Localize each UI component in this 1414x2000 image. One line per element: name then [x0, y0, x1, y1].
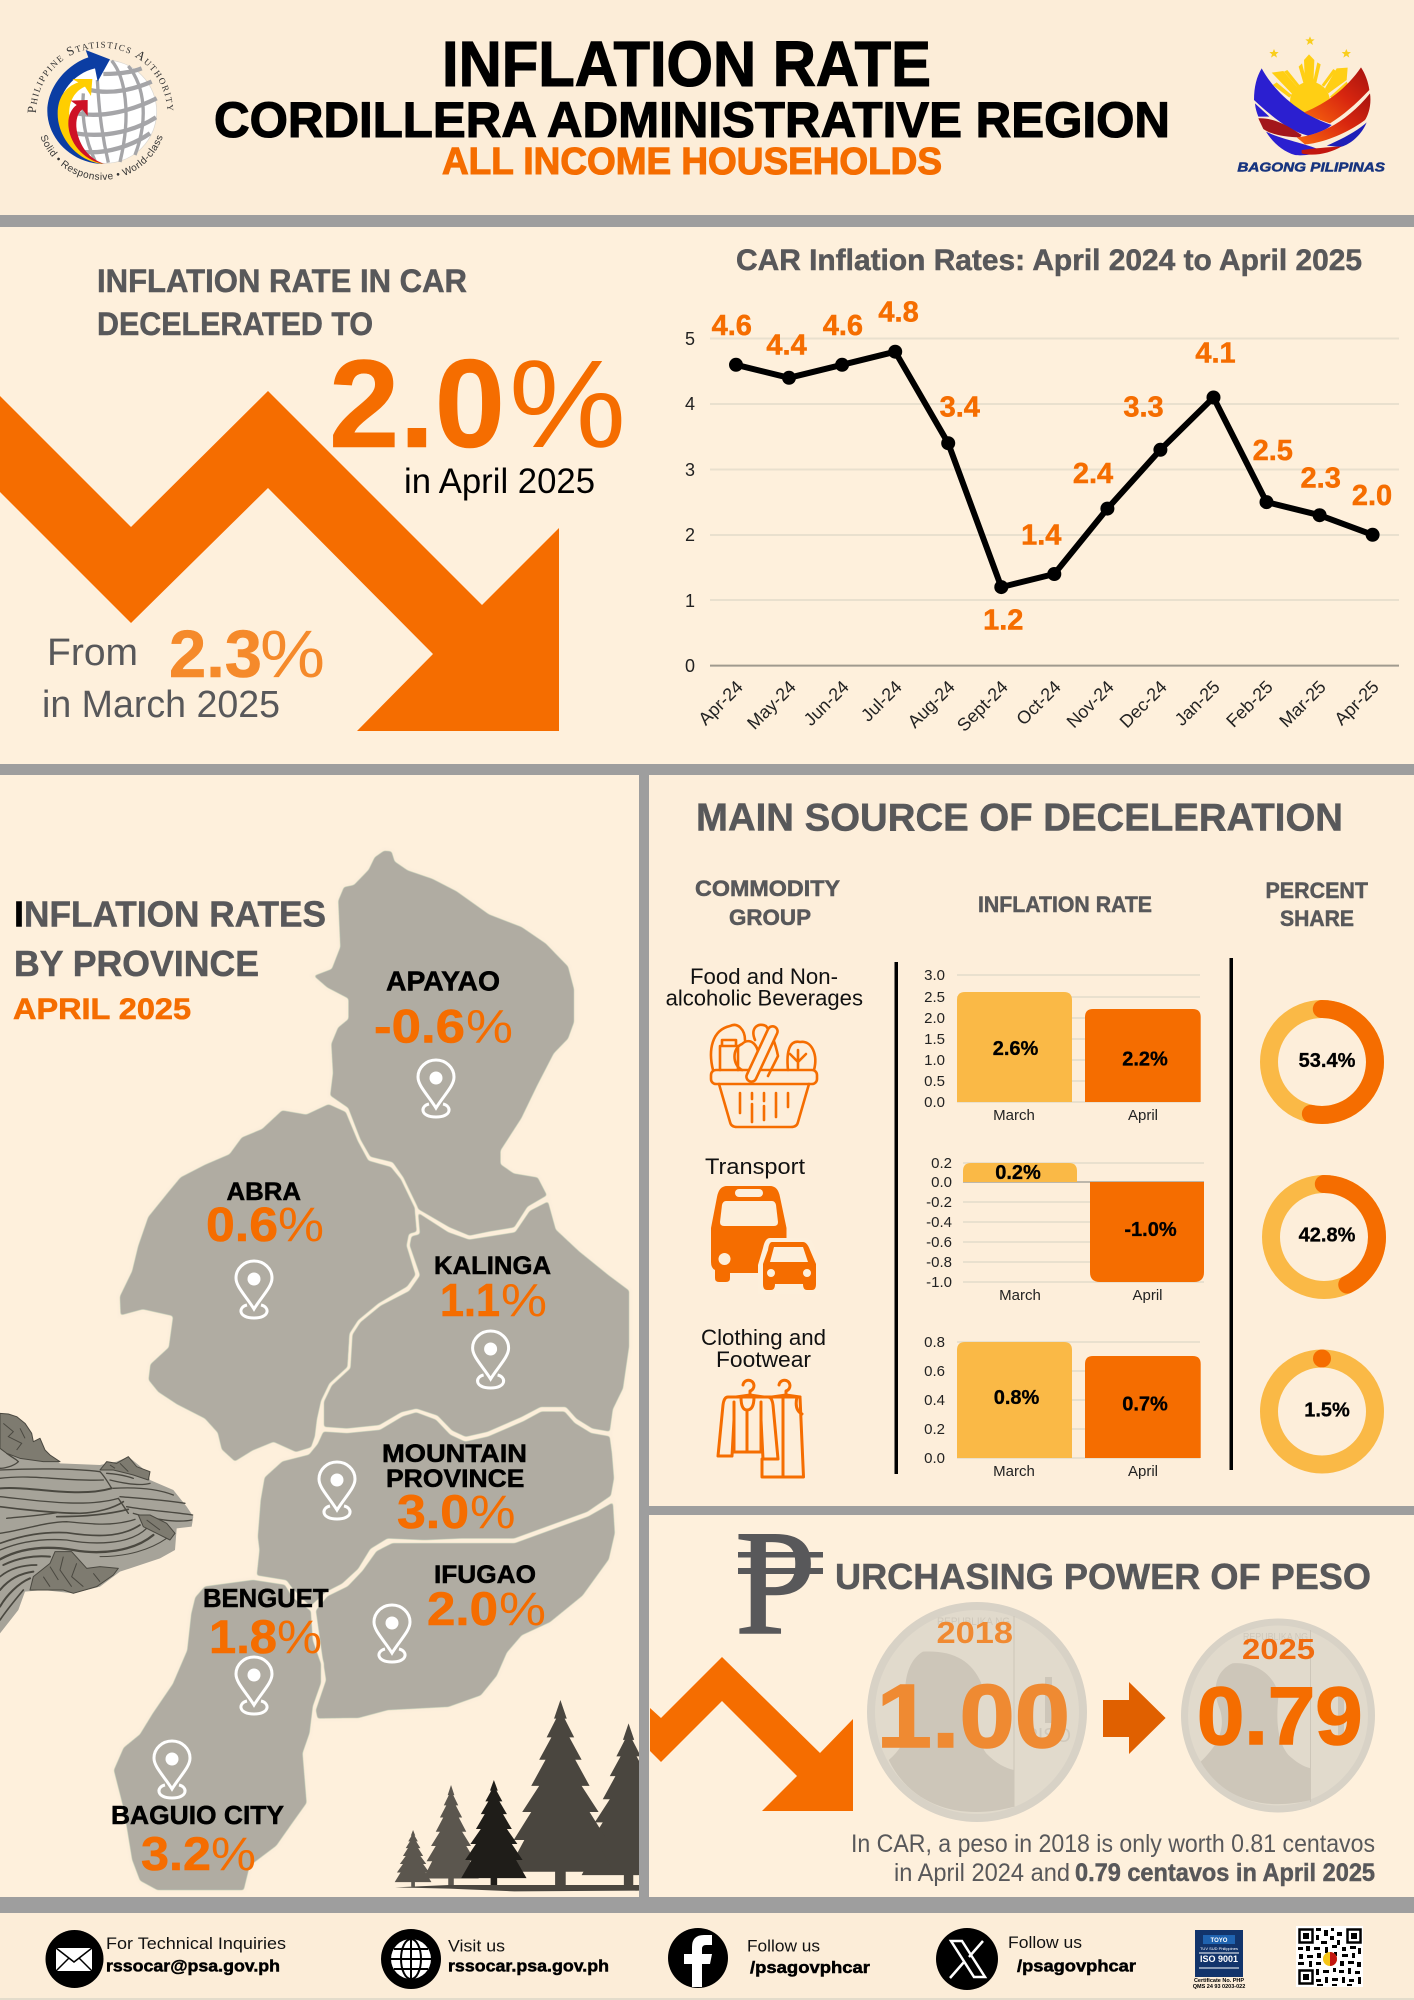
line chart: Apr-25 — [1330, 677, 1383, 729]
panel: headline inflation rate — [0, 263, 626, 731]
sub-subtitle: ALL INCOME HOUSEHOLDS — [442, 141, 942, 183]
bar chart: transport: -0.4 — [926, 1214, 952, 1231]
bar chart: transport: 0.0 — [931, 1174, 952, 1191]
line chart: 2 — [685, 525, 695, 545]
heading with peso sign: P — [735, 1500, 816, 1666]
contact: website — [381, 1929, 609, 1989]
panel: inflation rates by province — [0, 849, 676, 1892]
column header: percent share: SHARE — [1280, 906, 1354, 931]
province: Ifugao: IFUGAO — [434, 1561, 536, 1589]
bar chart: transport — [926, 1155, 1204, 1304]
province: Kalinga — [434, 1252, 551, 1388]
icon: pin — [374, 1605, 410, 1662]
logo: Philippine Statistics Authority: Solid • Responsive • World-class — [41, 135, 162, 180]
province: Apayao — [374, 966, 513, 1117]
bar chart: clothing: 0.6 — [924, 1363, 945, 1380]
province: Benguet: 1.8 — [209, 1610, 277, 1663]
line chart: 4.8 — [878, 296, 919, 328]
contact: facebook: Follow us — [747, 1937, 820, 1956]
bar chart: transport: April — [1132, 1287, 1163, 1304]
bar chart: food: 1.5 — [924, 1031, 945, 1048]
arrow between coins — [1103, 1682, 1166, 1754]
line chart: 0 — [685, 656, 695, 676]
bar chart: food: 3.0 — [924, 967, 945, 984]
value: 2.0% — [329, 335, 626, 474]
bar chart: transport: 0.2% — [995, 1162, 1041, 1184]
province: Ifugao: % — [499, 1582, 546, 1635]
coin: 2018 — [867, 1602, 1087, 1822]
province: Abra — [206, 1178, 324, 1318]
line chart: Sept-24 — [953, 677, 1012, 735]
badge: ISO 9001: Certificate No. PHP — [1194, 1978, 1244, 1984]
bar chart: transport: March — [999, 1287, 1041, 1304]
subtitle: CORDILLERA ADMINISTRATIVE REGION — [214, 92, 1170, 148]
coin: 2025: REPUBLIKA NG — [1243, 1632, 1308, 1643]
icon: pin — [473, 1331, 509, 1388]
bar chart: food: 1.0 — [924, 1052, 945, 1069]
caption: in April 2024 and — [894, 1859, 1070, 1887]
icon: pin — [418, 1060, 454, 1117]
label: food — [666, 964, 863, 1011]
province: Mountain Province: MOUNTAIN — [382, 1440, 527, 1468]
bar chart: transport: -1.0% — [1124, 1219, 1177, 1241]
coin: 2025 — [1181, 1618, 1375, 1812]
caption: in April 2025 — [404, 462, 595, 501]
province: Mountain Province — [319, 1440, 527, 1538]
label: from: From — [47, 632, 138, 674]
coin: 2018: 2018 — [936, 1615, 1013, 1650]
bar chart: food: 2.6% — [993, 1038, 1039, 1060]
icon: food basket — [711, 1025, 817, 1127]
province: Kalinga: KALINGA — [434, 1252, 551, 1280]
province: Benguet: BENGUET — [203, 1583, 329, 1613]
province: Apayao: APAYAO — [386, 966, 500, 997]
coin: 2018: PISO — [1025, 1725, 1071, 1747]
bar chart: food — [924, 967, 1201, 1124]
column header: commodity group — [695, 876, 840, 930]
column header: inflation rate: INFLATION RATE — [978, 892, 1152, 917]
icon: pin — [154, 1741, 190, 1798]
badge: ISO 9001: TOYO — [1211, 1938, 1228, 1944]
line chart: Oct-24 — [1012, 677, 1065, 729]
line chart: Jul-24 — [857, 677, 906, 725]
province: Baguio City — [111, 1741, 284, 1880]
line chart: Dec-24 — [1116, 677, 1171, 732]
line chart: 4.4 — [766, 330, 807, 362]
panel: line chart — [685, 244, 1399, 735]
icon: big down arrow — [0, 391, 559, 731]
icon: down arrow — [650, 1657, 853, 1811]
province: Abra: 0.6 — [206, 1199, 278, 1252]
coin: 2018: 1.00 — [877, 1667, 1070, 1767]
column header: commodity group: GROUP — [729, 905, 811, 930]
line chart: 3.3 — [1123, 392, 1164, 424]
heading: MAIN SOURCE OF DECELERATION — [696, 797, 1343, 840]
province: Mountain Province: PROVINCE — [386, 1465, 524, 1493]
heading with peso sign: URCHASING POWER OF PESO — [835, 1556, 1371, 1597]
province: Ifugao: 2.0 — [427, 1582, 498, 1635]
bar chart: food: 0.0 — [924, 1094, 945, 1111]
line chart: 3 — [685, 460, 695, 480]
panel: main source of deceleration — [666, 797, 1377, 1480]
province: Baguio City: % — [211, 1827, 256, 1880]
column header: commodity group: COMMODITY — [695, 876, 840, 901]
bar chart: transport: -0.2 — [926, 1194, 952, 1211]
header — [28, 28, 1386, 183]
bar chart: transport: -0.8 — [926, 1254, 952, 1271]
value: 2.3%: % — [260, 617, 325, 692]
badge: ISO 9001: ISO 9001 — [1200, 1954, 1238, 1964]
caption: 0.79 centavos in April 2025 — [1075, 1859, 1375, 1887]
contact: X — [936, 1928, 1136, 1990]
coin: 2018: REPUBLIKA NG — [937, 1616, 1010, 1628]
contact: X: /psagovphcar — [1017, 1957, 1136, 1976]
contact: website: Visit us — [448, 1937, 505, 1956]
contact: facebook — [668, 1928, 870, 1988]
line chart: 1.4 — [1021, 519, 1061, 551]
heading: INFLATION RATE IN CAR — [97, 263, 467, 299]
illustration: rice terraces — [0, 1413, 193, 1633]
line chart: Feb-25 — [1222, 677, 1277, 731]
chart title: CAR Inflation Rates: April 2024 to April 2025 — [736, 244, 1362, 277]
coin: 2025: 2025 — [1242, 1634, 1315, 1666]
line chart: Aug-24 — [904, 677, 959, 732]
caption — [851, 1830, 1375, 1887]
heading: I — [14, 894, 24, 935]
province: Baguio City: 3.2 — [141, 1827, 211, 1880]
illustration: pine trees — [395, 1700, 676, 1891]
column header: percent share — [1266, 878, 1369, 931]
bar chart: clothing: 0.8% — [994, 1387, 1040, 1409]
line chart: Apr-24 — [694, 677, 747, 729]
icon: pin — [236, 1657, 272, 1714]
caption: In CAR, a peso in 2018 is only worth 0.81 centavos — [851, 1830, 1375, 1858]
bar chart: clothing: 0.7% — [1122, 1394, 1168, 1416]
heading line 2: BY PROVINCE — [14, 943, 259, 984]
bar chart: transport: -1.0 — [926, 1274, 952, 1291]
column header: percent share: PERCENT — [1266, 878, 1369, 903]
heading with peso sign — [735, 1500, 1371, 1666]
bar chart: food: March — [993, 1107, 1035, 1124]
icon: clothes on hangers — [718, 1380, 804, 1477]
bar chart: clothing: 0.8 — [924, 1334, 945, 1351]
contact: email: rssocar@psa.gov.ph — [106, 1957, 280, 1976]
contact: website: rssocar.psa.gov.ph — [448, 1957, 609, 1976]
line chart: 2.5 — [1253, 435, 1293, 467]
province: Apayao: -0.6 — [374, 1000, 465, 1053]
bar chart: clothing: March — [993, 1463, 1035, 1480]
title: INFLATION RATE — [442, 28, 931, 100]
label: transport: Transport — [705, 1154, 805, 1179]
line chart — [685, 296, 1399, 735]
province: Benguet: % — [277, 1610, 322, 1663]
donut chart: clothing 1.5% — [1269, 1350, 1375, 1464]
line chart: 2.0 — [1352, 480, 1392, 512]
line chart: 2.3 — [1301, 463, 1341, 495]
bar chart: food: 2.0 — [924, 1010, 945, 1027]
bar chart: food: 2.5 — [924, 989, 945, 1006]
badge: ISO 9001: TUV SUD Philippines — [1200, 1946, 1238, 1951]
value: 2.3% — [169, 617, 325, 692]
donut chart: transport 42.8% — [1271, 1184, 1377, 1290]
map of the Cordillera provinces — [112, 849, 631, 1892]
line chart: 4.6 — [712, 310, 752, 342]
logo: Philippine Statistics Authority — [28, 42, 174, 180]
QR code — [1296, 1926, 1363, 1987]
panel: purchasing power of peso — [650, 1500, 1375, 1887]
line chart: May-24 — [743, 677, 800, 733]
line chart: 1.2 — [983, 604, 1023, 636]
bar chart: clothing: 0.4 — [924, 1392, 945, 1409]
value: 2.0%: 2.0 — [329, 335, 505, 474]
contact: facebook: /psagovphcar — [750, 1958, 870, 1977]
line chart: Nov-24 — [1063, 677, 1118, 732]
province: Mountain Province: % — [470, 1485, 516, 1538]
caption: in March 2025 — [42, 684, 280, 726]
province: Mountain Province: 3.0 — [397, 1485, 469, 1538]
icon: bus and car — [711, 1186, 820, 1294]
bar chart: food: 2.2% — [1122, 1049, 1168, 1071]
line chart: Jan-25 — [1171, 677, 1224, 730]
line chart: 4.1 — [1195, 338, 1236, 370]
bar chart: clothing: 0.2 — [924, 1421, 945, 1438]
line chart: 4.6 — [823, 310, 863, 342]
footer — [46, 1926, 1363, 1990]
contact: email — [46, 1930, 286, 1988]
province: Baguio City: BAGUIO CITY — [111, 1800, 284, 1830]
province: Abra: % — [278, 1199, 324, 1252]
contact: X: Follow us — [1008, 1933, 1082, 1952]
period label: APRIL 2025 — [13, 993, 191, 1026]
bar chart: clothing: April — [1128, 1463, 1158, 1480]
donut chart: food 53.4% — [1269, 1009, 1375, 1115]
value: 2.0%: % — [509, 335, 626, 474]
province: Ifugao — [374, 1561, 546, 1662]
bar chart: clothing — [924, 1334, 1201, 1480]
line chart: 5 — [685, 329, 695, 349]
contact: email: For Technical Inquiries — [106, 1934, 286, 1953]
icon: pin — [236, 1261, 272, 1318]
province: Kalinga: % — [501, 1274, 547, 1326]
line chart: Jun-24 — [800, 677, 853, 730]
line chart: Mar-25 — [1275, 677, 1330, 731]
badge: ISO 9001 — [1193, 1930, 1245, 1990]
province: Apayao: % — [466, 1000, 513, 1053]
line chart: 2.4 — [1073, 458, 1113, 490]
bar chart: clothing: 0.0 — [924, 1450, 945, 1467]
icon: pin — [319, 1462, 355, 1519]
province: Kalinga: 1.1 — [440, 1274, 500, 1326]
bar chart: transport: -0.6 — [926, 1234, 952, 1251]
heading: NFLATION RATES — [24, 894, 326, 935]
label: clothing: Footwear — [716, 1347, 811, 1372]
line chart: 3.4 — [940, 392, 980, 424]
donut chart: transport 42.8%: 42.8% — [1299, 1225, 1356, 1247]
line chart: 1 — [685, 591, 695, 611]
donut chart: clothing 1.5%: 1.5% — [1304, 1400, 1350, 1422]
badge: ISO 9001: QMS 24 93 0203-022 — [1193, 1984, 1245, 1990]
value: 2.3%: 2.3 — [169, 617, 262, 692]
logo: Philippine Statistics Authority: Philippine Statistics Authority — [28, 42, 174, 113]
coin: 2025: 0.79 — [1197, 1671, 1362, 1762]
heading line 2: DECELERATED TO — [97, 306, 373, 342]
label: food: Food and Non- — [690, 964, 838, 989]
bar chart: food: 0.5 — [924, 1073, 945, 1090]
province: Abra: ABRA — [226, 1178, 301, 1206]
bar chart: transport: 0.2 — [931, 1155, 952, 1172]
bar chart: food: April — [1128, 1107, 1158, 1124]
logo: Bagong Pilipinas — [1237, 36, 1385, 175]
donut chart: food 53.4%: 53.4% — [1299, 1050, 1356, 1072]
label: clothing — [701, 1325, 826, 1372]
label: food: alcoholic Beverages — [666, 986, 863, 1011]
label: clothing: Clothing and — [701, 1325, 826, 1350]
province: Benguet — [203, 1583, 329, 1714]
line chart: 4 — [685, 394, 695, 414]
logo: Bagong Pilipinas: BAGONG PILIPINAS — [1237, 160, 1385, 175]
